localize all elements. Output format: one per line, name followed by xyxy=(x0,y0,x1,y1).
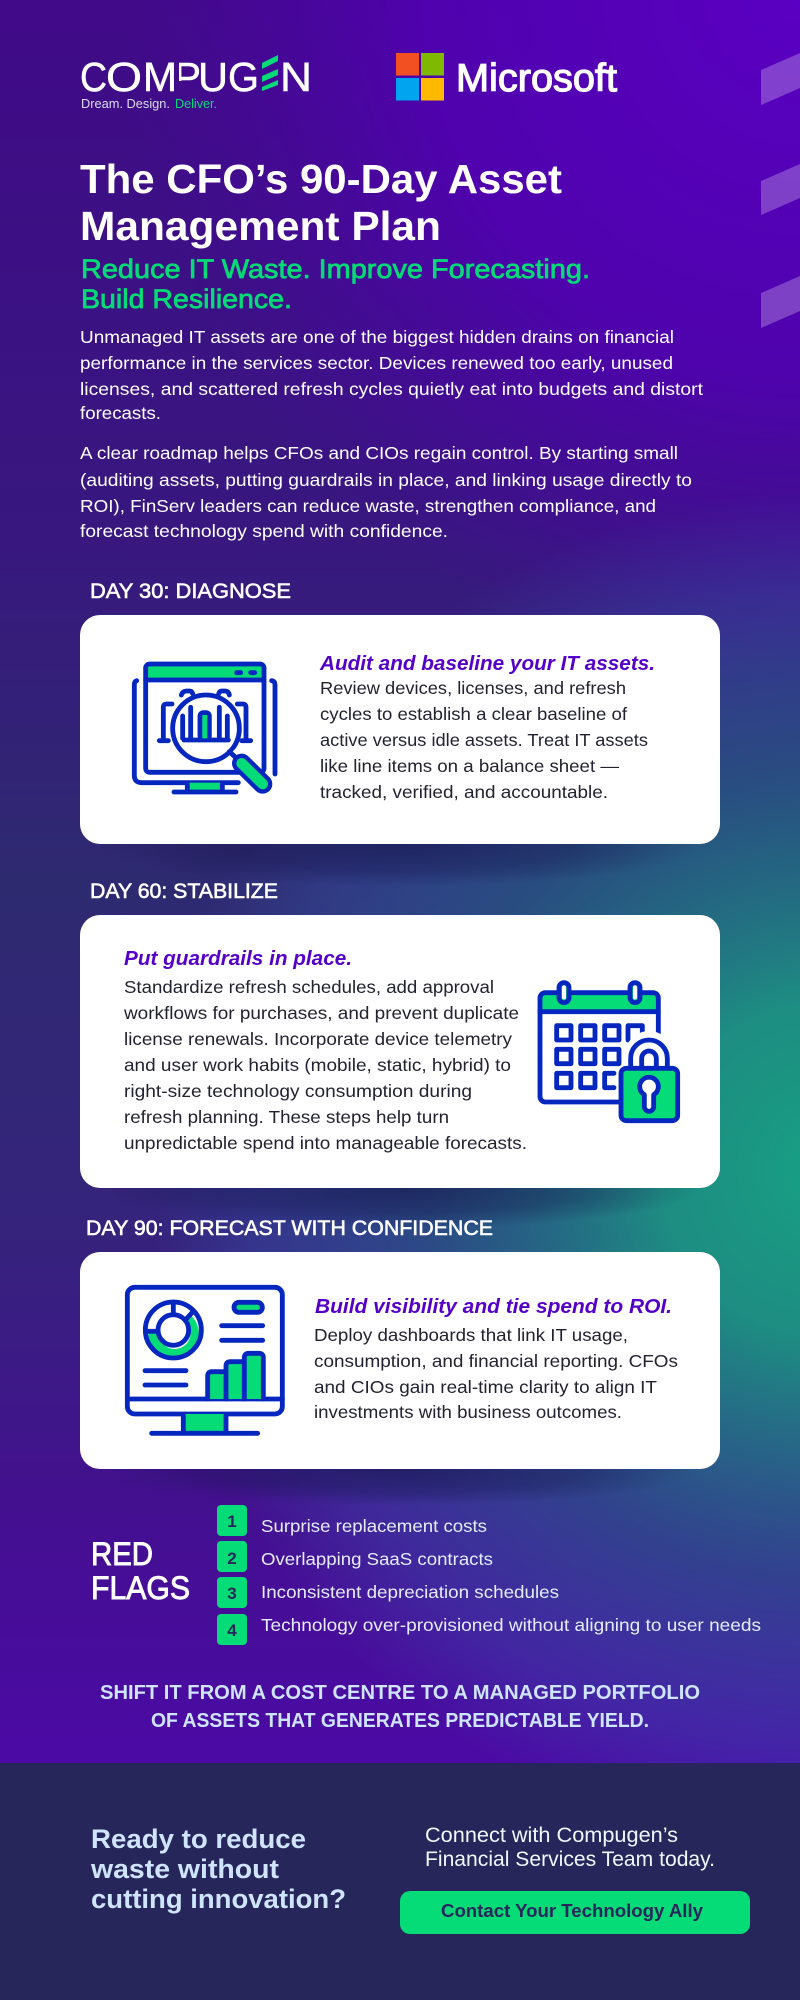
item 4 xyxy=(217,1614,761,1645)
logo: Compugen: O xyxy=(106,54,142,100)
item 3: 3 xyxy=(227,1584,237,1603)
footer connect text: Financial Services Team today. xyxy=(425,1847,715,1871)
callout: shift IT statement: OF ASSETS THAT GENERATES PREDICTABLE YIELD. xyxy=(151,1710,649,1732)
logo: Compugen: G xyxy=(228,54,259,100)
card text: and CIOs gain real-time clarity to align IT xyxy=(314,1377,657,1397)
card text: workflows for purchases, and prevent duplicate xyxy=(123,1003,519,1023)
heading: day 90: DAY 90: FORECAST WITH CONFIDENCE xyxy=(86,1216,493,1240)
subtitle: Build Resilience. xyxy=(81,284,292,314)
logo: Compugen: Deliver. xyxy=(175,96,217,111)
logo: Compugen: M xyxy=(143,54,177,100)
callout: shift IT statement: SHIFT IT FROM A COST CENTRE TO A MANAGED PORTFOLIO xyxy=(100,1682,700,1704)
intro paragraph 1: forecasts. xyxy=(80,403,161,423)
item 2 xyxy=(217,1541,493,1572)
icon: calendar with padlock xyxy=(540,983,678,1121)
card text: license renewals. Incorporate device telemetry xyxy=(124,1029,512,1049)
logo: Compugen: U xyxy=(198,54,228,100)
card text: Put guardrails in place. xyxy=(124,948,352,970)
item 1: Surprise replacement costs xyxy=(261,1516,487,1536)
item 4: 4 xyxy=(227,1621,237,1640)
footer question: cutting innovation? xyxy=(91,1884,346,1914)
card text: refresh planning. These steps help turn xyxy=(124,1107,449,1127)
panel: day 90 card xyxy=(80,1252,720,1506)
callout: shift IT statement xyxy=(100,1682,700,1732)
intro paragraph 2 xyxy=(80,443,692,541)
heading: red flags xyxy=(91,1536,190,1606)
logo: Compugen: C xyxy=(80,54,107,100)
heading: day 60: DAY 60: STABILIZE xyxy=(90,879,278,903)
logo: Compugen: Dream. Design. xyxy=(81,96,170,111)
logo: Microsoft xyxy=(396,53,617,100)
card text: tracked, verified, and accountable. xyxy=(320,782,608,802)
card text: Audit and baseline your IT assets. xyxy=(319,653,655,675)
item 2: 2 xyxy=(227,1549,237,1568)
card text: Review devices, licenses, and refresh xyxy=(320,678,626,698)
footer question: Ready to reduce xyxy=(91,1824,306,1854)
card text: cycles to establish a clear baseline of xyxy=(320,704,627,724)
card text: Standardize refresh schedules, add approval xyxy=(124,977,494,997)
card text: consumption, and financial reporting. CFOs xyxy=(314,1351,678,1371)
title xyxy=(80,156,562,249)
item 1: 1 xyxy=(227,1512,237,1531)
title: Management Plan xyxy=(80,203,441,249)
icon: magnifying glass over chart window xyxy=(134,664,275,792)
card text: unpredictable spend into manageable forecasts. xyxy=(124,1133,527,1153)
intro paragraph 1 xyxy=(80,327,703,423)
panel: footer call to action xyxy=(0,1763,800,2000)
footer question xyxy=(90,1824,346,1914)
card text: like line items on a balance sheet — xyxy=(320,756,620,776)
card text: and user work habits (mobile, static, hybrid) to xyxy=(124,1055,511,1075)
heading: day 30: DAY 30: DIAGNOSE xyxy=(90,579,291,603)
item 3: Inconsistent depreciation schedules xyxy=(261,1582,559,1602)
footer connect text: Connect with Compugen’s xyxy=(425,1823,678,1847)
card text: Build visibility and tie spend to ROI. xyxy=(315,1296,672,1318)
intro paragraph 1: Unmanaged IT assets are one of the biggest hidden drains on financial xyxy=(80,327,674,347)
logo: Compugen: N xyxy=(280,54,312,100)
intro paragraph 2: forecast technology spend with confidence. xyxy=(80,521,448,541)
subtitle: Reduce IT Waste. Improve Forecasting. xyxy=(81,254,590,284)
card text: right-size technology consumption during xyxy=(124,1081,472,1101)
item 4: Technology over-provisioned without aligning to user needs xyxy=(261,1615,761,1635)
card text: investments with business outcomes. xyxy=(314,1402,622,1422)
contact button xyxy=(400,1891,750,1934)
card text: Deploy dashboards that link IT usage, xyxy=(314,1325,628,1345)
heading: red flags: RED xyxy=(91,1536,153,1572)
intro paragraph 1: licenses, and scattered refresh cycles quietly eat into budgets and distort xyxy=(80,379,703,399)
card text xyxy=(319,653,655,802)
item 3 xyxy=(217,1577,559,1608)
footer connect text xyxy=(425,1823,715,1871)
panel: day 30 card xyxy=(80,615,720,887)
intro paragraph 2: A clear roadmap helps CFOs and CIOs regain control. By starting small xyxy=(80,443,678,463)
decorative chevron stripes xyxy=(761,53,800,328)
card text xyxy=(314,1296,678,1422)
intro paragraph 1: performance in the services sector. Devices renewed too early, unused xyxy=(80,353,673,373)
logo: Compugen: P xyxy=(174,54,201,100)
footer question: waste without xyxy=(90,1854,279,1884)
subtitle xyxy=(81,254,590,314)
icon: dashboard monitor xyxy=(127,1287,282,1433)
item 1 xyxy=(217,1505,487,1536)
logo: Microsoft: Microsoft xyxy=(456,57,617,100)
title: The CFO’s 90-Day Asset xyxy=(80,156,562,202)
intro paragraph 2: (auditing assets, putting guardrails in place, and linking usage directly to xyxy=(80,470,692,490)
red flags list xyxy=(217,1505,761,1645)
contact button: Contact Your Technology Ally xyxy=(441,1901,703,1921)
item 2: Overlapping SaaS contracts xyxy=(261,1549,493,1569)
panel: day 60 card xyxy=(80,915,720,1229)
heading: red flags: FLAGS xyxy=(91,1570,190,1606)
card text: active versus idle assets. Treat IT assets xyxy=(320,730,648,750)
card text xyxy=(123,948,527,1153)
logo: Compugen xyxy=(80,54,312,111)
intro paragraph 2: ROI), FinServ leaders can reduce waste, strengthen compliance, and xyxy=(80,496,656,516)
